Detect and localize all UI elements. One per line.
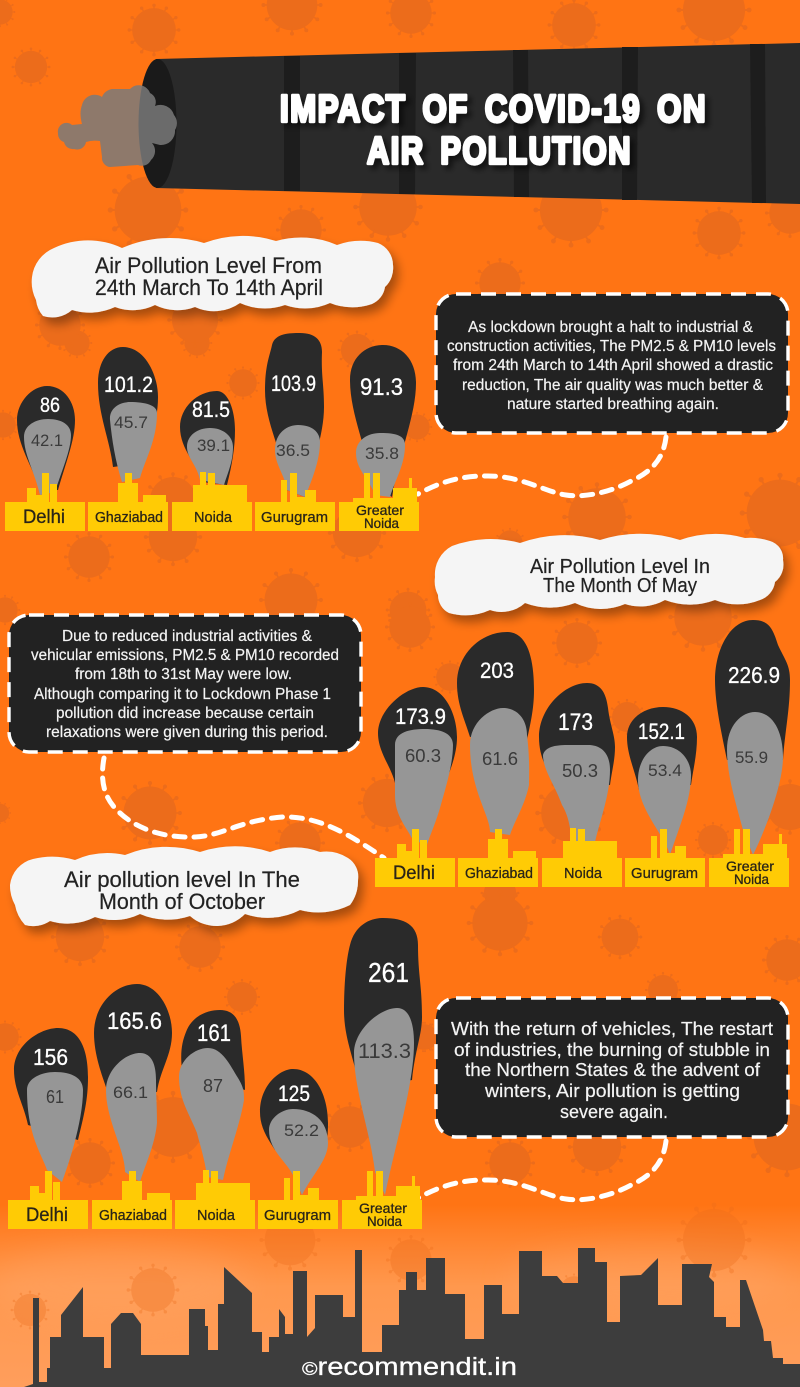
callout text bbox=[31, 628, 339, 741]
callout text: from 18th to 31st May were low. bbox=[75, 666, 292, 683]
title bbox=[280, 88, 707, 172]
plume: Noida: 161 bbox=[197, 1020, 231, 1047]
heading text: The Month Of May bbox=[543, 575, 697, 597]
chart: 24th March to 14th April bbox=[5, 333, 419, 531]
callout text: the Northern States & the advent of bbox=[465, 1060, 761, 1080]
callout text: With the return of vehicles, The restart bbox=[451, 1019, 773, 1039]
heading text bbox=[95, 253, 323, 300]
factories with city labels: Gurugram bbox=[261, 509, 328, 526]
plume: Ghaziabad: 45.7 bbox=[114, 413, 148, 432]
section 2 callout bbox=[9, 615, 361, 752]
callout text: from 24th March to 14th April showed a drastic bbox=[453, 357, 773, 374]
plume: Delhi: 42.1 bbox=[31, 431, 63, 450]
plume: Greater Noida: 55.9 bbox=[735, 748, 768, 767]
factories with city labels: Gurugram bbox=[631, 865, 698, 882]
plume: Greater Noida: 113.3 bbox=[358, 1040, 411, 1063]
cloud shape bbox=[435, 534, 783, 615]
plume: Noida bbox=[180, 391, 235, 485]
chart: month of October bbox=[8, 918, 422, 1229]
connector from callout 2 to chart 2 bbox=[102, 758, 384, 858]
plume: Ghaziabad bbox=[94, 984, 172, 1182]
factories with city labels: Delhi bbox=[23, 507, 65, 528]
callout text: Due to reduced industrial activities & bbox=[62, 628, 313, 645]
plume: Noida: 39.1 bbox=[197, 436, 230, 455]
plume: Gurugram bbox=[260, 1069, 328, 1195]
plume: Delhi: 156 bbox=[33, 1044, 68, 1070]
cloud shape bbox=[10, 846, 358, 926]
plume: Delhi: 60.3 bbox=[405, 746, 441, 766]
plume: Delhi: 86 bbox=[40, 394, 60, 417]
plume: Ghaziabad: 66.1 bbox=[113, 1083, 148, 1102]
plume: Ghaziabad: 61.6 bbox=[482, 749, 518, 769]
heading text: Air Pollution Level From bbox=[95, 253, 322, 278]
plume: Delhi bbox=[378, 687, 457, 845]
factories with city labels bbox=[8, 1170, 422, 1229]
chimney body bbox=[156, 43, 800, 204]
plume: Ghaziabad bbox=[457, 632, 534, 835]
plume: Delhi: 173.9 bbox=[395, 704, 446, 729]
heading text bbox=[530, 556, 710, 597]
plume: Gurugram: 53.4 bbox=[648, 761, 682, 780]
plume: Greater Noida: 261 bbox=[368, 957, 409, 988]
plume: Gurugram: 36.5 bbox=[276, 441, 310, 460]
callout text: vehicular emissions, PM2.5 & PM10 recorded bbox=[31, 647, 339, 664]
smoke puff bbox=[58, 85, 177, 167]
plume: Greater Noida: 35.8 bbox=[365, 444, 399, 463]
heading text: Air pollution level In The bbox=[64, 867, 300, 892]
smoke haze behind the skyline bbox=[0, 1205, 800, 1387]
callout text: winters, Air pollution is getting bbox=[484, 1081, 740, 1101]
factories with city labels: Noida bbox=[364, 515, 399, 531]
factories with city labels: Noida bbox=[367, 1213, 402, 1229]
callout text: pollution did increase because certain bbox=[56, 705, 314, 722]
factories with city labels bbox=[375, 828, 789, 887]
plume: Ghaziabad: 165.6 bbox=[107, 1008, 162, 1035]
factories with city labels: Noida bbox=[197, 1207, 236, 1224]
factories with city labels: Greater bbox=[726, 858, 774, 874]
callout text: reduction, The air quality was much better & bbox=[462, 377, 764, 394]
heading text: Month of October bbox=[99, 889, 265, 914]
callout text: nature started breathing again. bbox=[507, 396, 719, 413]
factories with city labels bbox=[5, 472, 419, 531]
callout text bbox=[447, 319, 776, 413]
heading text: Air Pollution Level In bbox=[530, 556, 710, 578]
plume: Gurugram: 125 bbox=[278, 1081, 310, 1106]
factories with city labels: Ghaziabad bbox=[95, 509, 163, 526]
factories with city labels: Ghaziabad bbox=[465, 865, 533, 882]
plume: Delhi: 61 bbox=[46, 1087, 64, 1107]
plume: Ghaziabad: 101.2 bbox=[104, 372, 153, 397]
connector from callout 1 to chart 1 bbox=[418, 437, 666, 496]
plume: Ghaziabad bbox=[98, 347, 158, 482]
callout text: relaxations were given during this period. bbox=[46, 724, 328, 741]
plume: Gurugram: 152.1 bbox=[638, 719, 685, 744]
plume: Delhi bbox=[14, 1028, 88, 1182]
factories with city labels: Delhi bbox=[393, 863, 435, 884]
factories with city labels: Gurugram bbox=[264, 1207, 331, 1224]
factories with city labels: Noida bbox=[564, 865, 603, 882]
plume: Greater Noida bbox=[715, 620, 790, 855]
connector from callout 3 to chart 3 bbox=[418, 1141, 666, 1200]
section 2 heading cloud bbox=[435, 534, 783, 615]
factories with city labels: Delhi bbox=[26, 1205, 68, 1226]
callout text: of industries, the burning of stubble in bbox=[454, 1040, 770, 1060]
plume: Noida: 87 bbox=[203, 1076, 223, 1096]
factories with city labels: Ghaziabad bbox=[99, 1207, 167, 1224]
chimney header bbox=[58, 43, 800, 204]
plume: Noida bbox=[539, 683, 615, 842]
plume: Noida: 173 bbox=[558, 709, 593, 736]
heading text: 24th March To 14th April bbox=[95, 275, 323, 300]
cloud shape bbox=[32, 236, 393, 317]
chimney opening bbox=[138, 59, 176, 188]
plume: Gurugram: 52.2 bbox=[284, 1121, 319, 1140]
plume: Greater Noida: 226.9 bbox=[728, 662, 780, 688]
title: IMPACT OF COVID-19 ON bbox=[280, 88, 707, 130]
section 3 callout bbox=[436, 998, 788, 1137]
plume: Gurugram bbox=[627, 707, 697, 855]
plume: Greater Noida bbox=[350, 345, 416, 497]
plume: Gurugram bbox=[265, 333, 324, 497]
factories with city labels: Greater bbox=[359, 1200, 407, 1216]
section 3 heading cloud bbox=[10, 846, 358, 926]
plume: Noida bbox=[179, 1010, 245, 1180]
chart: month of May bbox=[375, 620, 790, 887]
callout text: Although comparing it to Lockdown Phase 1 bbox=[34, 686, 331, 703]
plume: Noida: 81.5 bbox=[192, 397, 230, 422]
factories with city labels: Noida bbox=[734, 871, 769, 887]
factories with city labels: Noida bbox=[194, 509, 233, 526]
chimney bands bbox=[284, 44, 766, 203]
plume: Ghaziabad: 203 bbox=[480, 658, 514, 683]
callout text: construction activities, The PM2.5 & PM10 levels bbox=[447, 338, 776, 355]
callout text: As lockdown brought a halt to industrial & bbox=[468, 319, 754, 336]
plume: Greater Noida bbox=[344, 918, 422, 1195]
plume: Greater Noida: 91.3 bbox=[360, 374, 403, 401]
callout text bbox=[451, 1019, 773, 1122]
credit: recommendit.in: ©recommendit.in bbox=[302, 1353, 517, 1381]
plume: Gurugram: 103.9 bbox=[271, 371, 316, 396]
plume: Noida: 50.3 bbox=[562, 761, 598, 781]
factories with city labels: Greater bbox=[356, 502, 404, 518]
heading text bbox=[64, 867, 300, 914]
callout text: severe again. bbox=[560, 1102, 668, 1122]
section 1 callout bbox=[436, 294, 788, 433]
plume: Delhi bbox=[17, 386, 75, 495]
city skyline silhouette bbox=[24, 1248, 800, 1387]
title: AIR POLLUTION bbox=[367, 130, 632, 172]
section 1 heading cloud bbox=[32, 236, 393, 317]
